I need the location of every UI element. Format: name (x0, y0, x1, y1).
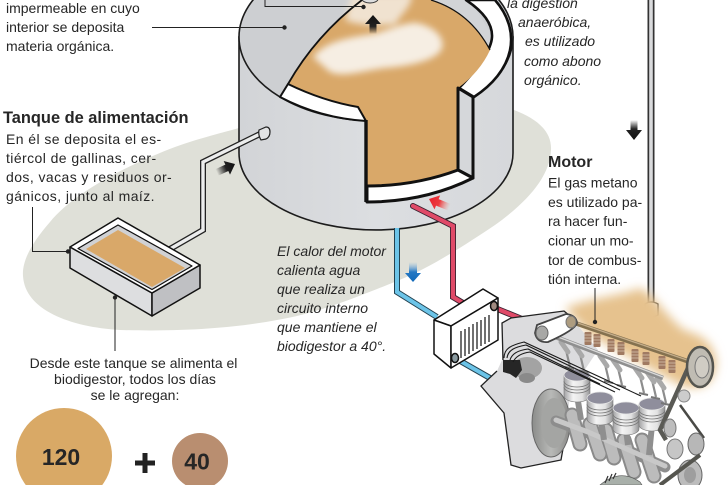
heading: Tanque de alimentación: Tanque de alimentación (3, 109, 188, 127)
text: heat description: circuito interno (277, 300, 368, 316)
heat exchanger (434, 289, 498, 368)
gas outlet (362, 0, 378, 3)
leader line: cover (152, 25, 287, 30)
connecting rods (577, 395, 652, 455)
left face (70, 247, 152, 316)
gas heat glow (565, 288, 716, 388)
text: heat description: El calor del motor (277, 243, 387, 259)
circle: 40 (172, 433, 228, 485)
right cut wall (458, 88, 473, 178)
text: motor description: tión interna. (548, 271, 621, 287)
beige ground shadow (23, 110, 551, 330)
text: feed tank description (6, 131, 172, 204)
top pulley (687, 347, 713, 387)
timing belt loop (535, 314, 577, 342)
text: impermeable description: impermeable en cuyo (6, 0, 140, 16)
arrow: cold water (405, 262, 421, 282)
text: motor description (548, 174, 643, 287)
text: daily feed description (30, 355, 237, 403)
lower pulleys (678, 390, 690, 402)
pistons (564, 369, 590, 402)
engine (481, 288, 716, 485)
arrow: feed into tank (214, 157, 238, 179)
feedstock fill (86, 230, 185, 287)
text: motor description: ra hacer fun- (548, 213, 628, 229)
pipe cap (259, 127, 270, 140)
text: daily feed description: se le agregan: (91, 387, 179, 403)
valve springs (584, 332, 592, 345)
text: heat description (277, 243, 387, 354)
bottom white wall band (367, 170, 473, 202)
text: digestion description: como abono (524, 53, 601, 69)
distributor and wires (512, 357, 542, 379)
text: impermeable description: materia orgánica. (6, 38, 114, 54)
feed pipe (170, 127, 270, 249)
oil filter (600, 476, 642, 485)
inner back wall (425, 0, 495, 90)
gas accumulation cloud (313, 0, 443, 74)
text: feed tank description: En él se deposita el es- (6, 131, 162, 147)
tank top cover (239, 0, 513, 121)
crankshaft (556, 415, 665, 476)
camshaft upper (572, 322, 687, 361)
flywheel (532, 389, 570, 457)
text: digestion description (507, 0, 601, 88)
text: motor description: tor de combus- (548, 252, 642, 268)
pipe end cap (645, 302, 658, 317)
text: digestion description: anaeróbica, (518, 14, 591, 30)
leader line: daily feed (113, 295, 117, 351)
text: heat description: que realiza un (277, 281, 365, 297)
feed tank (70, 218, 200, 316)
text: daily feed description: biodigestor, todos los días (54, 371, 216, 387)
dome cut line (288, 0, 362, 84)
text: motor description: cionar un mo- (548, 232, 634, 248)
circle: 120 (16, 408, 112, 485)
text: impermeable description (6, 0, 140, 54)
cold water pipe (397, 228, 490, 378)
heading: Motor: Motor (548, 154, 592, 171)
text: heat description: que mantiene el (277, 319, 378, 335)
text: digestion description: es utilizado (525, 33, 595, 49)
right white wall band (459, 0, 511, 97)
camshaft lower (545, 333, 663, 378)
leader line: motor (593, 288, 597, 324)
arrow: gas down (626, 120, 642, 140)
text: daily feed description: Desde este tanque se alimenta el (30, 355, 237, 371)
right face (152, 265, 200, 316)
valves (561, 342, 574, 369)
text: heat description: biodigestor a 40°. (277, 338, 386, 354)
text: digestion description: orgánico. (524, 72, 582, 88)
timing belt (660, 348, 697, 440)
arrow: gas up (365, 15, 381, 34)
circle: 40: 40 (184, 448, 210, 474)
left white wall band (280, 84, 366, 121)
timing pulleys (536, 326, 548, 340)
text: motor description: El gas metano (548, 174, 638, 190)
engine back plate (481, 311, 598, 468)
rim (70, 218, 200, 293)
cut vertical edge (364, 120, 368, 202)
text: feed tank description: tiércol de gallinas, cer- (6, 150, 157, 166)
text: feed tank description: gánicos, junto al maíz. (6, 188, 155, 204)
circle: 120: 120 (42, 444, 80, 470)
biodigester tank (239, 0, 513, 230)
gas pipe (645, 0, 658, 317)
arrow: hot water (426, 192, 452, 214)
plus sign (135, 453, 155, 473)
tank body (239, 37, 513, 230)
text: feed tank description: dos, vacas y residuos or- (6, 169, 172, 185)
text: motor description: es utilizado pa- (548, 194, 643, 210)
leader line: dome (265, 0, 366, 9)
text: heat description: calienta agua (277, 262, 361, 278)
inner edge (78, 225, 192, 290)
leader line: feed tank text (32, 207, 70, 254)
organic matter inside (288, 0, 490, 186)
fins (461, 315, 489, 358)
hot water pipe (413, 206, 522, 319)
text: impermeable description: interior se deposita (6, 19, 125, 35)
